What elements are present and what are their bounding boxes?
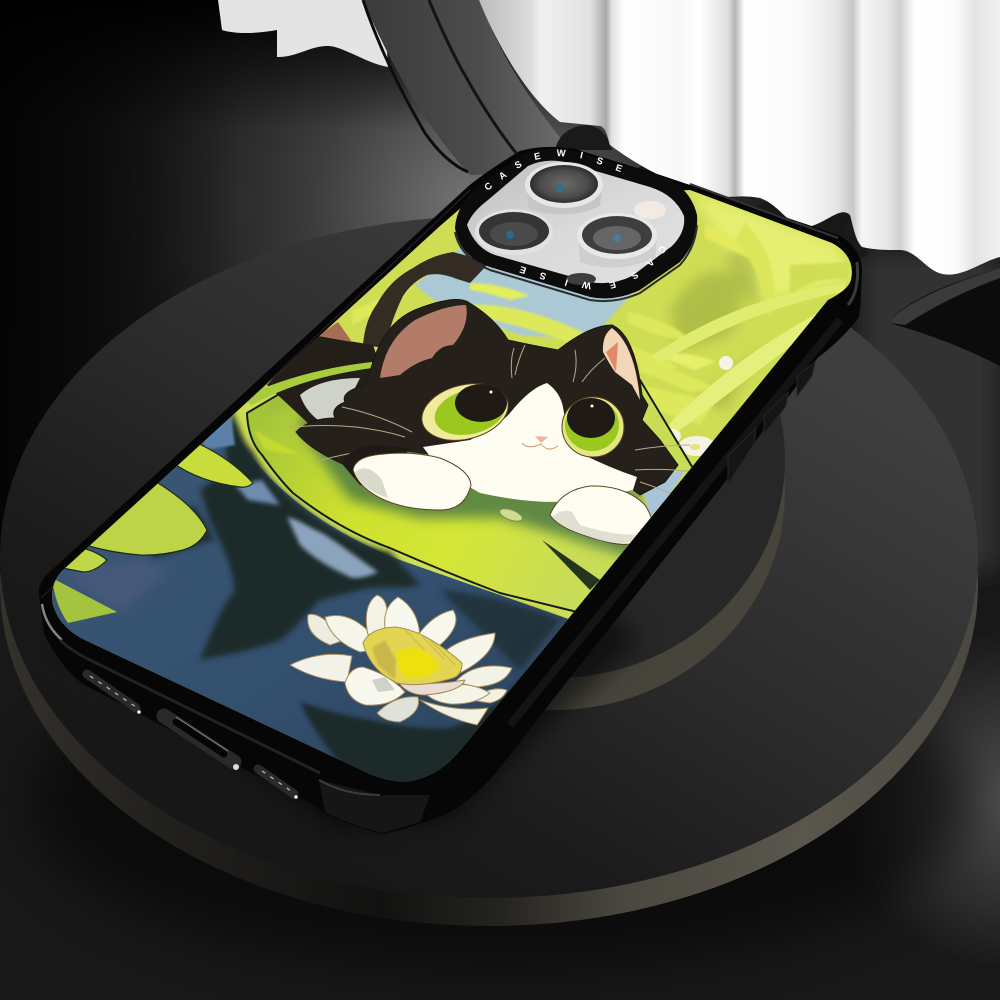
phone shadow	[60, 500, 640, 830]
art: pale water	[415, 240, 640, 340]
art: upper blue water	[202, 416, 236, 450]
lens left	[475, 209, 553, 255]
art: pad shade near cat	[250, 395, 640, 560]
ports: charging	[164, 716, 239, 770]
art: pale water highlight	[235, 480, 378, 578]
art: leaf strips	[352, 283, 715, 425]
art: blue water by paw	[640, 470, 685, 515]
curtain right	[479, 0, 1000, 275]
art: small lily pads	[52, 443, 253, 623]
art: pad highlight	[255, 430, 296, 454]
art: cat head and body	[296, 300, 678, 495]
large disc base	[0, 216, 978, 970]
art: olive foliage shade	[670, 245, 760, 410]
right dark block	[889, 268, 1000, 366]
lens top	[525, 162, 603, 215]
art: left eye	[421, 383, 509, 441]
art: left paw	[353, 453, 471, 510]
art: left water tint	[72, 562, 162, 610]
disc shadow	[30, 630, 970, 970]
art: pad notch	[542, 540, 600, 590]
art: cat tail	[363, 252, 490, 348]
small disc	[325, 242, 785, 710]
art: right ear pink	[606, 342, 618, 372]
art: water lily	[290, 595, 512, 725]
art: left paw black patch	[343, 448, 408, 486]
ports: speaker left	[87, 674, 141, 714]
art: blade one	[650, 284, 845, 362]
art: bright top right	[690, 190, 855, 300]
art: cat back	[247, 322, 376, 423]
flash	[634, 201, 666, 219]
art: upper background	[40, 180, 870, 800]
art: blade two	[668, 314, 817, 431]
camera ring	[455, 148, 697, 301]
brand text: bottom arc: CASEWISE	[518, 243, 668, 291]
art: tall grass	[705, 222, 850, 320]
curtain left	[218, 0, 388, 67]
brand text: top arc: CASEWISE	[482, 148, 624, 193]
small disc rim	[325, 274, 785, 710]
case artwork	[40, 180, 870, 800]
art: nose and mouth	[522, 436, 558, 449]
ports: speaker right	[258, 769, 298, 799]
art: right paw	[550, 486, 652, 544]
small disc top	[325, 242, 785, 678]
art: right eye	[562, 397, 624, 457]
art: right paw shade	[552, 511, 640, 543]
camera glass	[467, 161, 684, 283]
disc top surface	[0, 216, 978, 898]
disc rim	[0, 244, 978, 926]
art: whiskers	[285, 345, 695, 498]
side buttons	[728, 362, 815, 484]
art: big lily pad	[247, 370, 700, 612]
phone case body	[40, 148, 861, 833]
lens right	[577, 213, 657, 268]
art: distant white flower	[670, 356, 733, 456]
dark curved stand arcs	[363, 0, 600, 175]
curtain shadow scallops	[555, 125, 868, 265]
art: water shadows	[150, 410, 560, 790]
art: right ear inner	[603, 328, 640, 400]
microphone sensor	[566, 273, 596, 285]
art: dark water	[52, 422, 568, 782]
art: white chest	[423, 383, 637, 502]
art: water drop	[499, 508, 523, 522]
art: left ear inner	[380, 305, 467, 378]
art: left paw shade	[355, 468, 388, 498]
